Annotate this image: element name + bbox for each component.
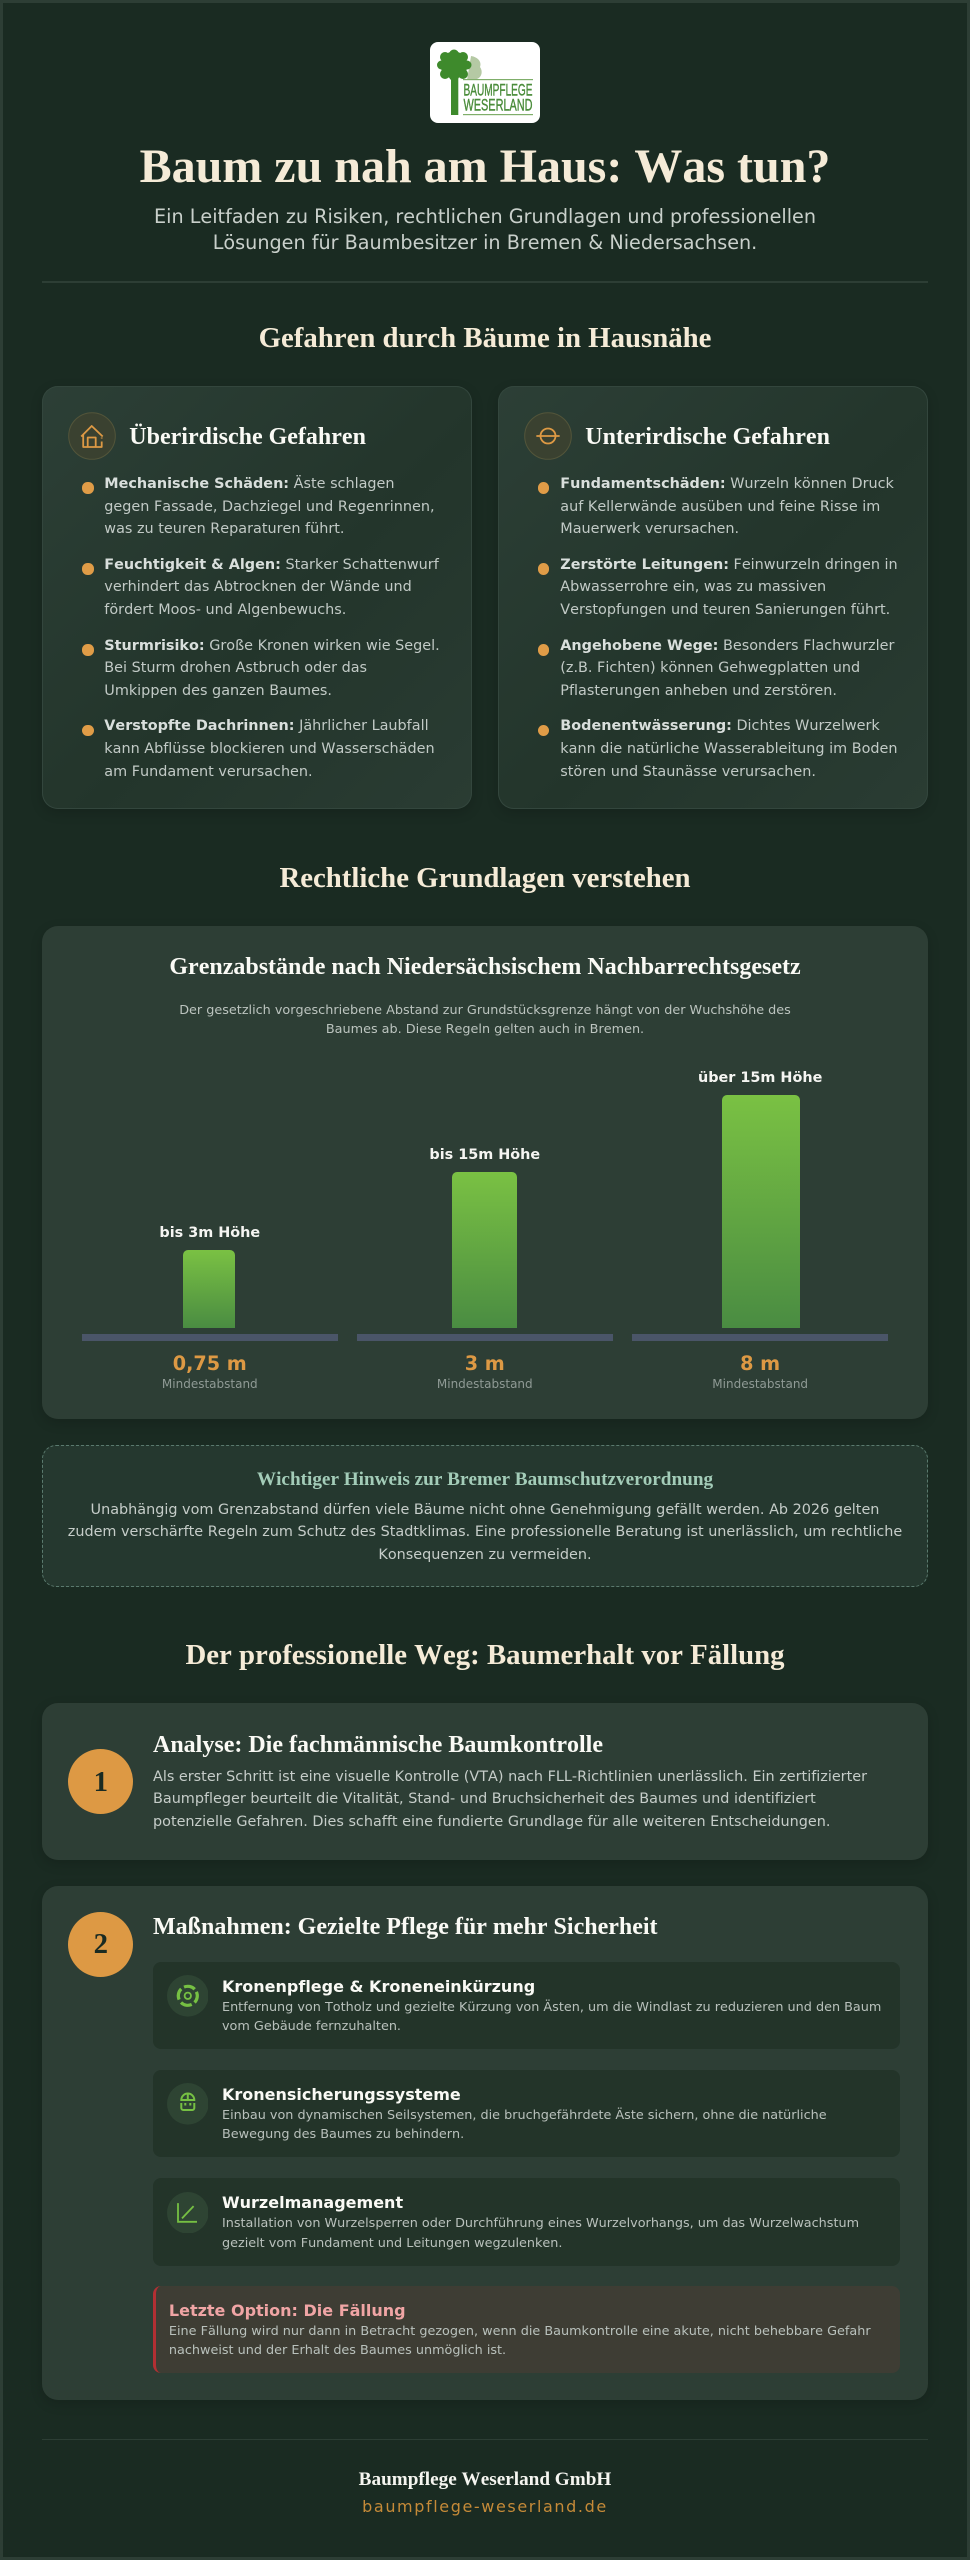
bar: über 15m: 8 m (740, 1352, 780, 1375)
measure: Kronensicherungssysteme: Kronensicherungssysteme (222, 2085, 461, 2104)
chart description: Baumes ab. Diese Regeln gelten auch in Bremen. (326, 1022, 644, 1037)
step text: Als erster Schritt ist eine visuelle Kontrolle (VTA) nach FLL-Richtlinien unerlässlich. Ein zertifizierter (153, 1769, 867, 1785)
heading: Gefahren: Gefahren durch Bäume in Hausnähe (259, 322, 711, 354)
step text: Baumpfleger beurteilt die Vitalität, Stand- und Bruchsicherheit des Baumes und identifiziert (153, 1791, 816, 1807)
bullet list: am Fundament verursachen. (104, 764, 313, 780)
measure: Kronensicherungssysteme: Bewegung des Baumes zu behindern. (222, 2127, 464, 2142)
measure: Wurzelmanagement: Installation von Wurzelsperren oder Durchführung eines Wurzelvorhangs, um das Wurzelwachstum (222, 2216, 859, 2231)
bullet list: Pflasterungen anheben und zerstören. (560, 683, 837, 699)
bullet list: Bodenentwässerung: Dichtes Wurzelwerk (560, 718, 880, 734)
icon: safety system (167, 2083, 208, 2124)
step number 1 (68, 1749, 133, 1814)
warning: Letzte Option: Letzte Option: Die Fällung (169, 2301, 406, 2320)
measure: Kronenpflege (153, 1962, 900, 2049)
footer: baumpflege-weserland.de (362, 2497, 608, 2516)
measure: Kronensicherungssysteme: Einbau von dynamischen Seilsystemen, die bruchgefährdete Äste sichern, ohne die natürliche (222, 2108, 827, 2123)
warning: Letzte Option: Eine Fällung wird nur dann in Betracht gezogen, wenn die Baumkontrolle eine akute, nicht behebbare Gefahr (169, 2324, 871, 2339)
bar: über 15m (632, 1070, 888, 1391)
bar: bis 3m: bis 3m Höhe (159, 1225, 260, 1241)
step number 2: 2 (94, 1928, 108, 1960)
footer: Baumpflege Weserland GmbH (359, 2469, 611, 2490)
bar: bis 3m: 0,75 m (173, 1352, 247, 1375)
bullet list: gegen Fassade, Dachziegel und Regenrinnen, (104, 499, 435, 515)
bullet list: Umkippen des ganzen Baumes. (104, 683, 332, 699)
icon: house (68, 412, 116, 460)
heading: Der professionelle Weg: Der professionelle Weg: Baumerhalt vor Fällung (185, 1639, 785, 1671)
measure: Wurzelmanagement: Wurzelmanagement (222, 2193, 403, 2212)
measure: Kronenpflege: Kronenpflege & Kroneneinkürzung (222, 1977, 535, 1996)
callout: Bremer Baumschutzverordnung: zudem verschärfte Regeln zum Schutz des Stadtklimas. Eine professionelle Beratung ist unerlässlich, um rechtliche (68, 1524, 902, 1540)
callout: Bremer Baumschutzverordnung: Konsequenzen zu vermeiden. (378, 1547, 592, 1563)
footer (358, 2469, 611, 2516)
bullet list: Verstopfte Dachrinnen: Jährlicher Laubfall (104, 718, 429, 734)
icon: root chart (167, 2192, 208, 2233)
bar: bis 15m: Mindestabstand (437, 1377, 533, 1391)
bullet list: Bei Sturm drohen Astbruch oder das (104, 660, 367, 676)
bullet list: (z.B. Fichten) können Gehwegplatten und (560, 660, 860, 676)
icon: underground pipe (524, 412, 572, 460)
logo: Baumpflege Weserland (430, 42, 540, 123)
bullet list: was zu teuren Reparaturen führt. (104, 521, 344, 537)
bullet list: Verstopfungen und teuren Sanierungen führt. (560, 602, 890, 618)
bullet list: Sturmrisiko: Große Kronen wirken wie Segel. (104, 638, 440, 654)
panel: step 1 (42, 1703, 928, 1860)
measure: Kronenpflege: Entfernung von Totholz und gezielte Kürzung von Ästen, um die Windlast zu reduzieren und den Baum (222, 2000, 881, 2015)
measure: Wurzelmanagement (153, 2178, 900, 2266)
bullet list (82, 475, 440, 780)
panel: Grenzabstände (42, 926, 928, 1419)
title: Baum zu nah am Haus: Was tun? (140, 140, 830, 193)
bar chart (82, 1070, 888, 1391)
measure: Kronensicherungssysteme (153, 2070, 900, 2157)
bar: bis 3m (82, 1225, 338, 1391)
bar: bis 15m: bis 15m Höhe (429, 1147, 540, 1163)
bullet list: fördert Moos- und Algenbewuchs. (104, 602, 346, 618)
icon: crown (167, 1975, 208, 2016)
bullet list: Zerstörte Leitungen: Feinwurzeln dringen in (560, 557, 898, 573)
card title: Überirdische Gefahren (129, 424, 366, 450)
panel: Überirdische Gefahren (42, 386, 472, 809)
bullet list: Mechanische Schäden: Äste schlagen (104, 476, 395, 492)
measure: Wurzelmanagement: gezielt vom Fundament und Leitungen wegzulenken. (222, 2236, 562, 2251)
step text: potenzielle Gefahren. Dies schafft eine fundierte Grundlage für alle weiteren Entscheidungen. (153, 1814, 830, 1830)
bullet list: Mauerwerk verursachen. (560, 521, 739, 537)
bullet list: verhindert das Abtrocknen der Wände und (104, 579, 412, 595)
bar: bis 15m (357, 1147, 613, 1391)
callout: Bremer Baumschutzverordnung: Wichtiger Hinweis zur Bremer Baumschutzverordnung (257, 1469, 713, 1490)
subtitle (154, 204, 816, 254)
bullet list: kann die natürliche Wasserableitung im Boden (560, 741, 898, 757)
chart description (179, 1003, 791, 1037)
callout: Bremer Baumschutzverordnung (42, 1445, 928, 1587)
bullet list: Feuchtigkeit & Algen: Starker Schattenwurf (104, 557, 439, 573)
callout: Bremer Baumschutzverordnung: Unabhängig vom Grenzabstand dürfen viele Bäume nicht ohne Genehmigung gefällt werden. Ab 2026 gelten (91, 1502, 879, 1518)
header (140, 42, 830, 254)
bar: bis 15m: 3 m (465, 1352, 505, 1375)
warning: Letzte Option: nachweist und der Erhalt des Baumes unmöglich ist. (169, 2343, 506, 2358)
step text (153, 1769, 868, 1830)
heading: Rechtliche Grundlagen: Rechtliche Grundlagen verstehen (279, 862, 691, 894)
step title: Analyse: Die fachmännische Baumkontrolle (153, 1732, 603, 1758)
warning: Letzte Option (153, 2286, 900, 2373)
bullet list: kann Abflüsse blockieren und Wasserschäden (104, 741, 435, 757)
subtitle: Lösungen für Baumbesitzer in Bremen & Niedersachsen. (213, 230, 757, 254)
bar: über 15m: Mindestabstand (712, 1377, 808, 1391)
bullet list: Fundamentschäden: Wurzeln können Druck (560, 476, 894, 492)
chart title: Grenzabstände nach Niedersächsischem Nachbarrechtsgesetz (169, 954, 801, 980)
step number 2 (68, 1912, 133, 1977)
chart description: Der gesetzlich vorgeschriebene Abstand zur Grundstücksgrenze hängt von der Wuchshöhe des (179, 1003, 791, 1018)
bullet list: stören und Staunässe verursachen. (560, 764, 816, 780)
measure: Kronenpflege: vom Gebäude fernzuhalten. (222, 2019, 401, 2034)
bullet list: Abwasserrohre ein, was zu massiven (560, 579, 826, 595)
card title: Unterirdische Gefahren (585, 424, 830, 450)
bullet list: auf Kellerwände ausüben und feine Risse im (560, 499, 880, 515)
panel: Unterirdische Gefahren (498, 386, 928, 809)
step title: Maßnahmen: Gezielte Pflege für mehr Sicherheit (153, 1914, 658, 1940)
bullet list: Angehobene Wege: Besonders Flachwurzler (560, 638, 894, 654)
subtitle: Ein Leitfaden zu Risiken, rechtlichen Grundlagen und professionellen (154, 204, 816, 228)
bullet list (538, 476, 898, 780)
step number 1: 1 (94, 1766, 108, 1798)
bar: über 15m: über 15m Höhe (698, 1070, 822, 1086)
panel: step 2 (42, 1886, 928, 2400)
bar: bis 3m: Mindestabstand (162, 1377, 258, 1391)
